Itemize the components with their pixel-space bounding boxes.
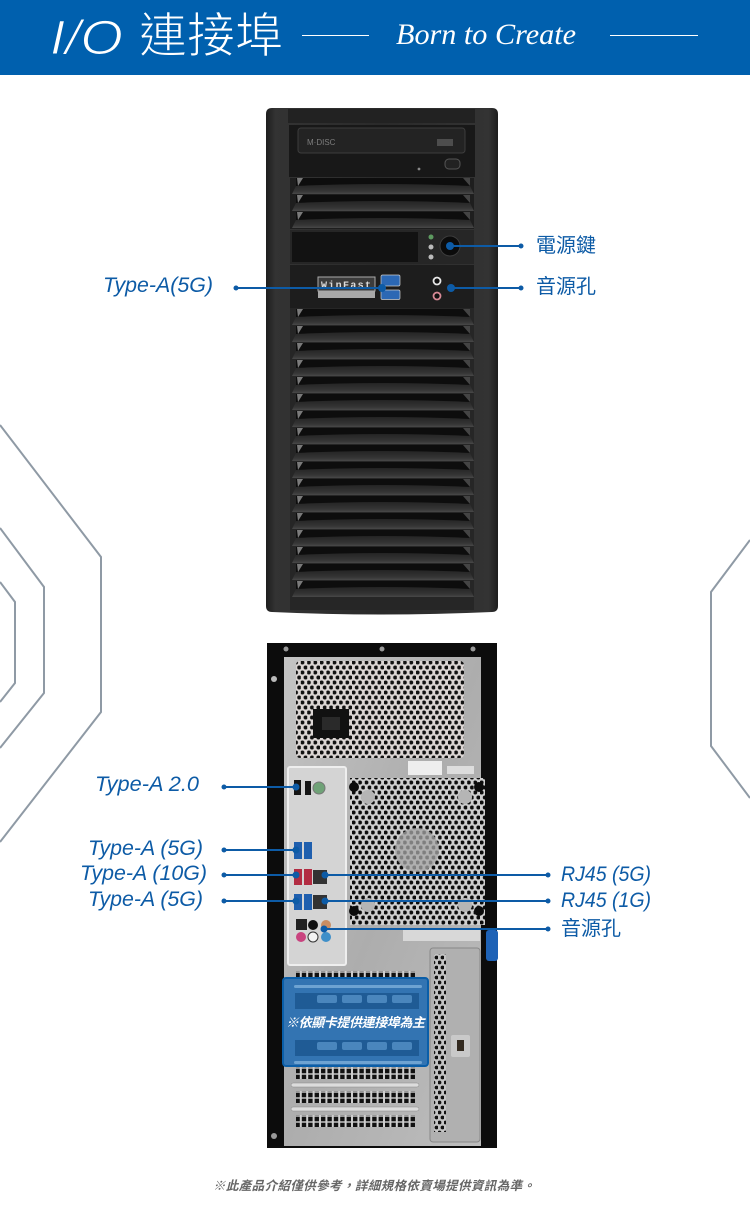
front callout: Type-A(5G): Type-A(5G) bbox=[103, 274, 213, 297]
front callout: power button bbox=[446, 234, 596, 257]
header banner bbox=[0, 0, 750, 75]
front callout: audio jacks bbox=[447, 275, 596, 298]
rear callout: Type-A 2.0 bbox=[95, 773, 300, 796]
front callout: power button: 電源鍵 bbox=[536, 234, 596, 257]
rear callout: Type-A (5G) upper bbox=[88, 837, 300, 860]
side access panel bbox=[430, 948, 480, 1142]
title: 連接埠 bbox=[139, 10, 283, 63]
rear callout: Type-A 2.0: Type-A 2.0 bbox=[95, 773, 199, 796]
rear callout: Type-A (5G) lower: Type-A (5G) bbox=[88, 888, 203, 911]
main vent louvers bbox=[290, 308, 474, 610]
front I/O panel: WinFast bbox=[321, 280, 371, 292]
rear callout: RJ45 (1G): RJ45 (1G) bbox=[561, 889, 651, 912]
model sticker bbox=[403, 928, 480, 941]
rear fan mesh bbox=[349, 778, 485, 925]
rear callout: audio jacks: 音源孔 bbox=[561, 917, 621, 940]
front view of tower bbox=[266, 108, 498, 614]
title: I/O bbox=[50, 12, 123, 65]
rear callout: Type-A (5G) upper: Type-A (5G) bbox=[88, 837, 203, 860]
graphics card highlight bbox=[283, 978, 428, 1066]
blue latch bbox=[486, 930, 498, 961]
power supply mesh and socket bbox=[296, 661, 464, 758]
rear callout: Type-A (10G): Type-A (10G) bbox=[80, 862, 207, 885]
upper louvers bbox=[290, 178, 474, 229]
tagline with rules: Born to Create bbox=[396, 18, 576, 51]
front I/O panel bbox=[290, 265, 474, 308]
footer disclaimer: ※此產品介紹僅供參考，詳細規格依賣場提供資訊為準。 bbox=[213, 1179, 535, 1193]
rear callout: RJ45 (5G): RJ45 (5G) bbox=[561, 863, 651, 886]
rear callout: Type-A (10G) bbox=[80, 862, 300, 885]
rear callout: RJ45 (5G) bbox=[322, 863, 651, 886]
rear labels bbox=[408, 761, 474, 775]
title bbox=[50, 10, 283, 65]
rear view of tower bbox=[267, 643, 498, 1148]
rear callout: Type-A (5G) lower bbox=[88, 888, 300, 911]
front callout: Type-A(5G) bbox=[103, 274, 386, 297]
power panel bbox=[290, 230, 474, 264]
front callout: audio jacks: 音源孔 bbox=[536, 275, 596, 298]
optical drive bay: M·DISC bbox=[307, 138, 336, 147]
expansion slots bbox=[291, 971, 419, 1127]
background hexagon outlines bbox=[0, 425, 750, 842]
rear callout: RJ45 (1G) bbox=[322, 889, 651, 912]
rear callout: audio jacks bbox=[320, 917, 621, 940]
optical drive bay bbox=[289, 125, 475, 177]
graphics card note: ※依顯卡提供連接埠為主 bbox=[286, 1015, 426, 1030]
I/O shield with ports bbox=[288, 767, 346, 965]
